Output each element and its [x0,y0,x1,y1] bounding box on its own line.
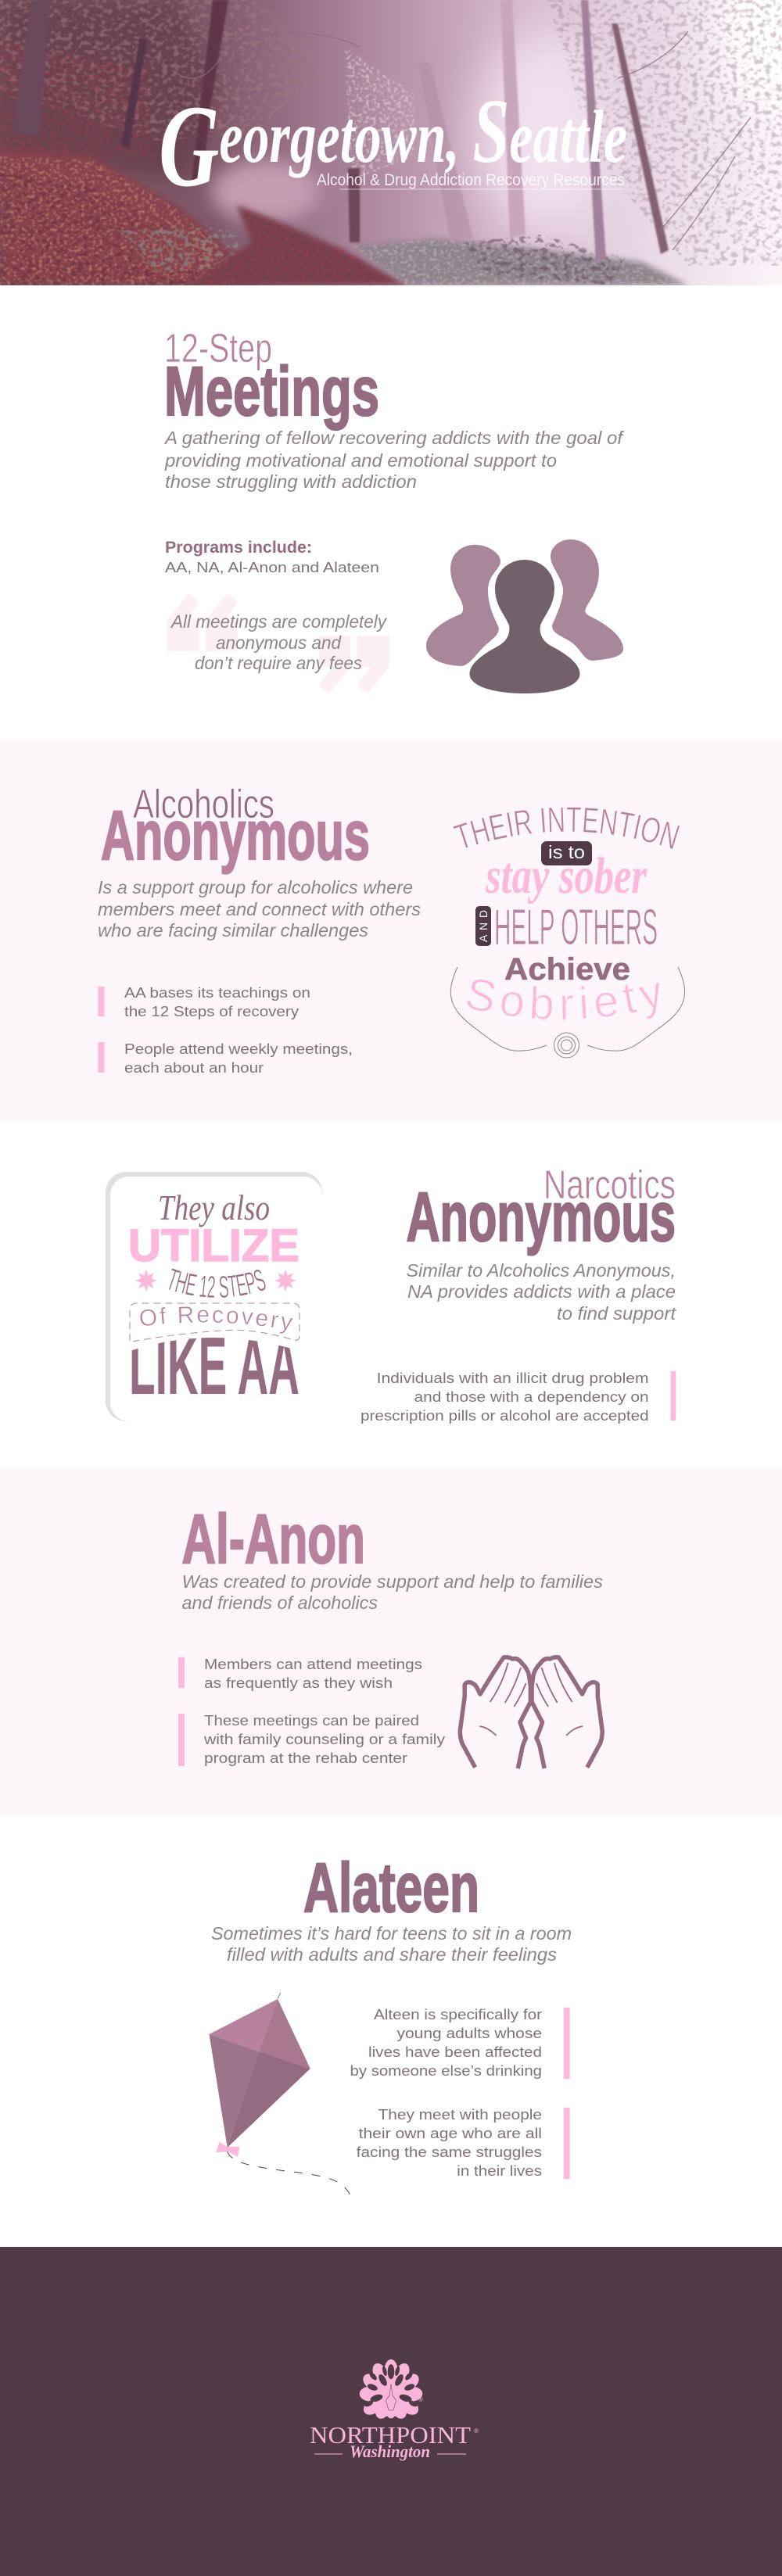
bullet: 12 steps: AA bases its teachings on [124,985,310,1001]
card: they also utilize [106,1172,322,1421]
intro paragraph: A gathering of fellow recovering addicts with the goal of [163,428,625,448]
card: they also utilize: THE 12 STEPS [169,1268,266,1298]
typographic graphic: intention: THEIR INTENTION [454,807,680,849]
footer panel [0,2247,782,2576]
Al-Anon description: and friends of alcoholics [181,1593,378,1613]
bullet: specifically for: by someone else’s drinking [350,2063,542,2079]
bullet: weekly meetings: People attend weekly meetings, [124,1041,353,1057]
heading: 12-Step Meetings: Meetings [164,352,379,430]
logo: Northpoint Washington: Washington [350,2442,430,2461]
bullet: specifically for: young adults whose [397,2026,542,2041]
intro paragraph [163,428,625,492]
typographic graphic: intention: Achieve [504,952,630,987]
Al-Anon description [181,1571,604,1613]
bullet: same age peers: their own age who are all [359,2126,542,2141]
hero subtitle: Alcohol & Drug Addiction Recovery Resources [317,171,625,189]
typographic graphic: intention: AND [477,910,490,942]
bullet: same age peers [357,2107,570,2179]
bullet: family programs: These meetings can be paired [204,1713,419,1729]
heading: Al-Anon: Al-Anon [181,1499,365,1578]
heading: Alcoholics Anonymous [101,782,370,874]
bullet: who is accepted [361,1370,676,1424]
logo: Northpoint Washington: ® [418,2396,423,2403]
heading: 12-Step Meetings: 12-Step [164,326,272,371]
bullet: weekly meetings [99,1041,353,1076]
card: they also utilize: UTILIZE [128,1220,300,1271]
programs list: AA, NA, Al-Anon and Alateen [165,560,379,575]
card: they also utilize: LIKE AA [129,1320,300,1412]
logo: Northpoint Washington [310,2359,479,2461]
intro paragraph: providing motivational and emotional support to [164,450,557,471]
icon: open hands [460,1657,602,1768]
card: they also utilize: They also [158,1188,270,1227]
bullet: 12 steps [99,985,310,1019]
icon: group of people [426,539,623,693]
callout: anonymous quote: don’t require any fees [195,653,362,673]
bullet: family programs: program at the rehab center [204,1750,407,1766]
programs list: Programs include: [165,539,312,557]
NA description: NA provides addicts with a place [407,1281,676,1302]
NA description [407,1260,677,1324]
hero title: Seattle [472,80,674,182]
typographic graphic: intention: Sobriety [467,979,659,1019]
bullet: attendance: Members can attend meetings [204,1657,422,1672]
typographic graphic: intention [450,807,685,1059]
Alateen description: filled with adults and share their feelings [227,1944,558,1965]
panel: narcotics anonymous [106,1163,677,1424]
panel: al-anon [0,1467,782,1815]
AA description: who are facing similar challenges [98,920,369,940]
heading: Narcotics Anonymous [407,1163,676,1256]
callout: anonymous quote: anonymous and [216,632,342,653]
panel: alateen [0,1815,782,2247]
logo: Northpoint Washington: ® [474,2427,479,2434]
logo: Northpoint Washington: NORTHPOINT [310,2421,471,2449]
heading: Alateen: Alateen [303,1848,479,1926]
bullet: attendance: as frequently as they wish [204,1675,393,1691]
bullet: 12 steps: the 12 Steps of recovery [124,1004,299,1019]
callout: anonymous quote: All meetings are completely [170,611,387,632]
Al-Anon description: Was created to provide support and help to families [181,1571,604,1592]
bullet: specifically for: Alteen is specifically for [374,2007,542,2022]
heading: 12-Step Meetings [164,326,379,430]
NA description: to find support [557,1303,677,1324]
Alateen description [211,1923,572,1965]
icon: kite [210,1993,351,2198]
typographic graphic: intention: stay sober [485,847,647,905]
Alateen description: Sometimes it’s hard for teens to sit in a room [211,1923,572,1944]
heading: Alcoholics Anonymous: Alcoholics [133,782,274,827]
bullet: family programs [178,1713,445,1766]
heading: Narcotics Anonymous: Narcotics [543,1163,676,1208]
bullet: same age peers: in their lives [457,2163,542,2179]
bullet: who is accepted: and those with a dependency on [414,1389,649,1405]
bullet: who is accepted: prescription pills or alcohol are accepted [361,1408,649,1424]
hero title: G [159,81,219,211]
bullet: specifically for: lives have been affected [368,2044,542,2060]
bullet: specifically for [350,2007,570,2079]
callout: anonymous quote [167,593,389,693]
programs list [165,539,379,575]
bullet: attendance [178,1657,422,1691]
bullet: same age peers: They meet with people [378,2107,542,2123]
intro paragraph: those struggling with addiction [165,471,417,492]
typographic graphic: intention: is to [548,842,585,862]
AA description: Is a support group for alcoholics where [98,877,413,897]
AA description [98,877,421,940]
bullet: who is accepted: Individuals with an illicit drug problem [377,1370,649,1386]
panel: alcoholics anonymous [0,740,782,1120]
bullet: same age peers: facing the same struggles [357,2144,542,2160]
NA description: Similar to Alcoholics Anonymous, [407,1260,676,1281]
AA description: members meet and connect with others [98,899,421,919]
bullet: weekly meetings: each about an hour [124,1060,264,1076]
bullet: family programs: with family counseling or a family [203,1732,445,1747]
hero banner [0,0,782,285]
icon: lotus [360,2359,422,2422]
heading: Alcoholics Anonymous: Anonymous [101,796,370,874]
panel: 12-step meetings [0,285,782,740]
hero title: eorgetown, [219,95,472,178]
card: they also utilize: Of Recovery [140,1307,292,1334]
